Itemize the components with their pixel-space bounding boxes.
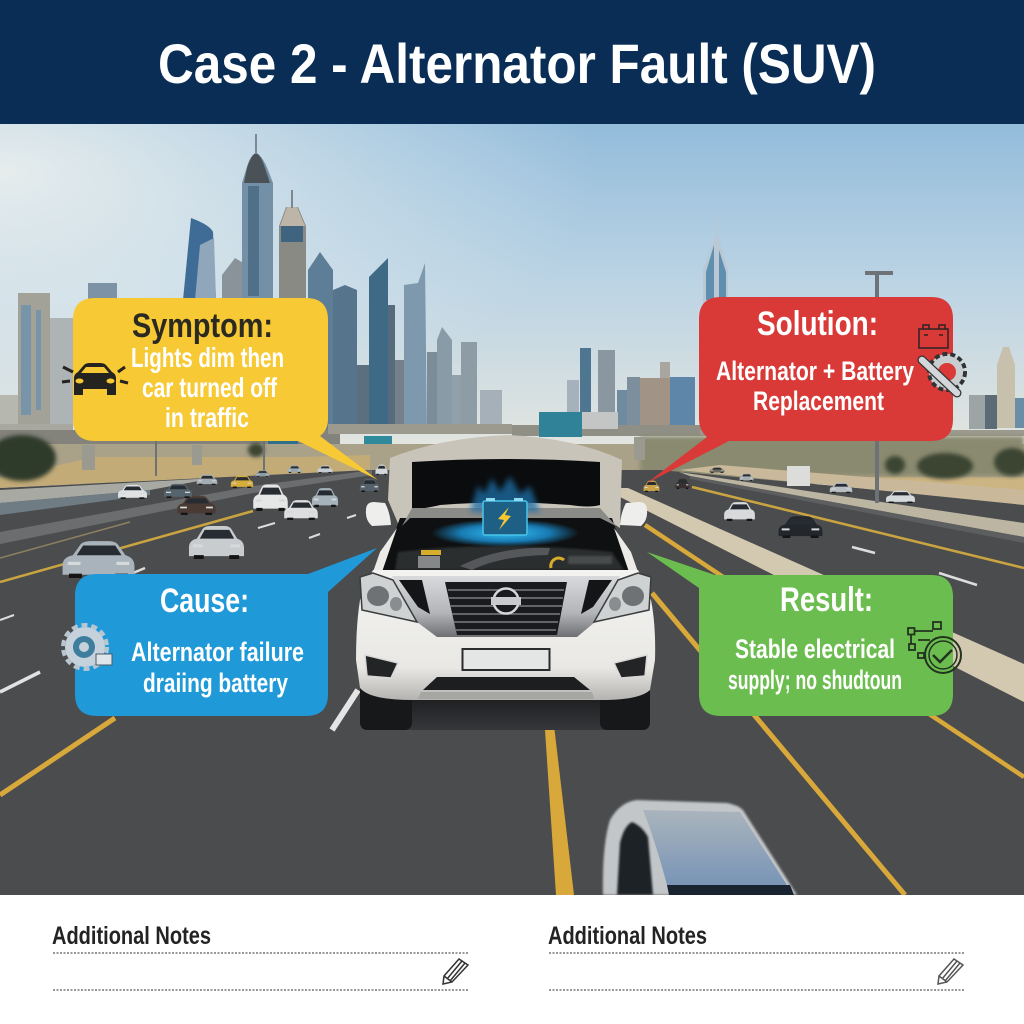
notes panel background	[0, 895, 1024, 1024]
roadside verges, sand and trees	[0, 435, 1024, 503]
headlights	[360, 573, 651, 622]
callout: solution	[647, 297, 965, 483]
cause heading: Cause:	[160, 582, 249, 620]
symptom text	[131, 342, 284, 433]
grille	[445, 582, 567, 635]
Nissan badge	[491, 588, 521, 614]
icon: battery	[919, 325, 948, 348]
title: Case 2 - Alternator Fault (SUV)	[158, 32, 876, 95]
side mirrors	[366, 502, 647, 526]
solution heading: Solution:	[757, 305, 878, 343]
road surface	[0, 470, 1024, 895]
icon: pencil left	[443, 959, 468, 984]
icon: car warning	[62, 363, 128, 395]
main SUV with open hood	[356, 435, 655, 730]
lower intake	[423, 677, 590, 690]
symptom bubble	[73, 298, 378, 480]
chrome grille surround	[392, 576, 620, 637]
city skyline right	[567, 203, 1024, 429]
white fenders beside engine bay	[373, 528, 638, 572]
result text: supply; no shudtoun	[728, 665, 902, 695]
symptom text: car turned off	[142, 372, 277, 403]
result text: Stable electrical	[735, 634, 895, 664]
solution text	[716, 356, 914, 416]
SUV tires	[360, 680, 650, 730]
solution text: Alternator + Battery	[716, 356, 914, 386]
lane markings	[0, 487, 1024, 895]
solution text: Replacement	[753, 386, 884, 416]
symptom text: in traffic	[165, 402, 249, 433]
callout: result	[647, 552, 961, 716]
shadow under SUV	[404, 696, 608, 730]
city skyline left	[0, 134, 502, 430]
side vents	[399, 580, 612, 614]
background traffic	[63, 465, 915, 578]
open hood	[388, 435, 622, 528]
cause text: draiing battery	[143, 668, 288, 698]
notes heading right: Additional Notes	[548, 922, 707, 950]
notes heading left: Additional Notes	[52, 922, 211, 950]
license plate	[462, 649, 550, 670]
icon: network with check	[908, 622, 961, 673]
car body	[356, 570, 655, 700]
callout: symptom	[62, 298, 378, 480]
left carriageway median	[0, 478, 215, 515]
result text	[728, 634, 902, 695]
result bubble	[647, 552, 953, 716]
hood gray strip	[402, 508, 616, 526]
concrete barrier right	[620, 488, 1024, 702]
callout: cause	[63, 548, 377, 716]
far right wall and median	[679, 465, 1024, 543]
skid plate	[418, 692, 594, 699]
result heading: Result:	[780, 581, 873, 619]
hood inner dark panel	[412, 459, 600, 509]
symptom heading: Symptom:	[132, 307, 273, 345]
overhead sign and overpass	[0, 412, 1024, 453]
engine bay	[380, 518, 630, 572]
solution bubble	[647, 297, 953, 483]
cause text: Alternator failure	[131, 637, 304, 667]
cause text	[131, 637, 304, 698]
icon: alternator gear	[63, 625, 112, 669]
icon: wrench and gear	[922, 354, 965, 393]
street lamps	[155, 271, 893, 503]
foreground blurred silver car	[603, 800, 797, 895]
engine parts	[395, 546, 624, 570]
fog lights	[365, 655, 647, 678]
cause bubble	[75, 548, 377, 716]
header band	[0, 0, 1024, 124]
centre yellow lane line	[543, 700, 574, 895]
notes block left	[52, 922, 469, 990]
glowing battery icon	[431, 476, 579, 547]
left guard rail	[0, 470, 372, 544]
icon: pencil right	[938, 959, 963, 984]
symptom text: Lights dim then	[131, 342, 284, 373]
notes block right	[548, 922, 964, 990]
sky	[0, 124, 1024, 444]
